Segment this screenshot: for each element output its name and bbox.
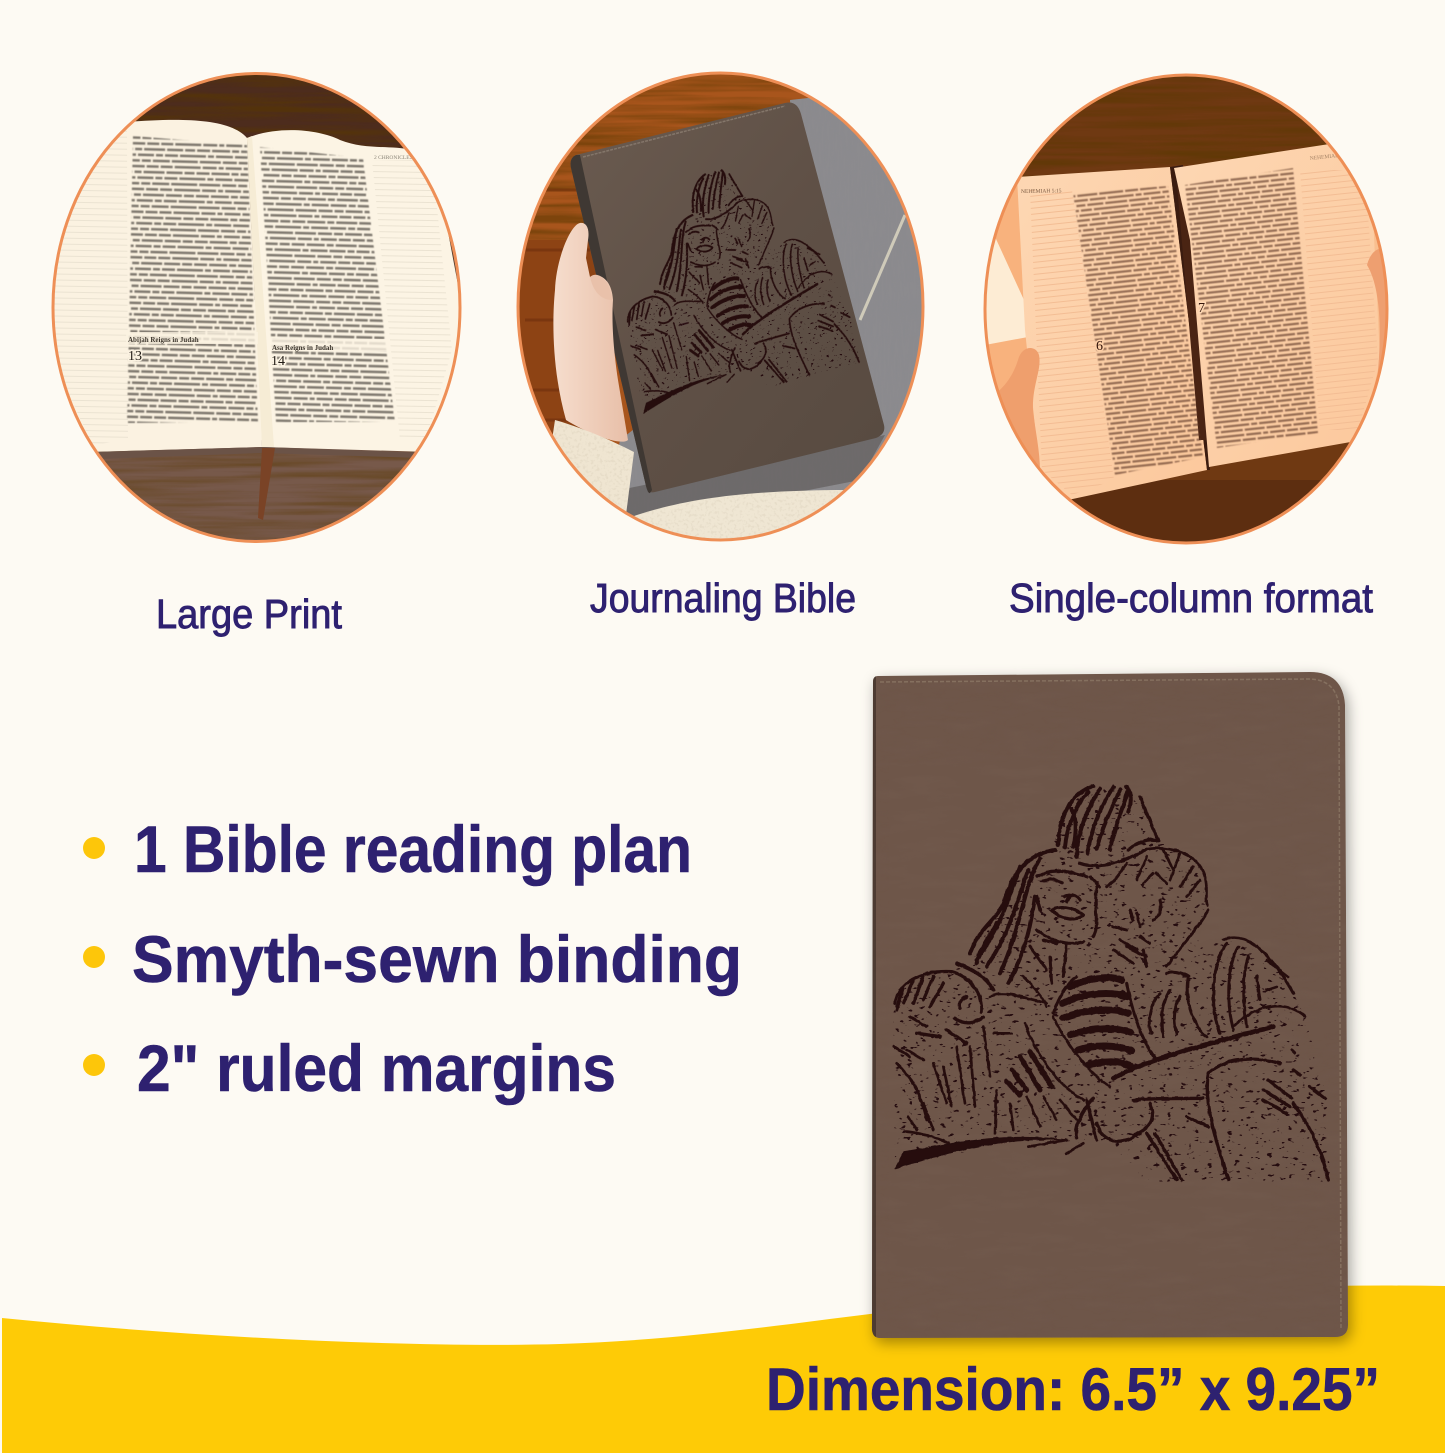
text column left [1073,186,1203,475]
left page edges and fingers [988,184,1036,428]
chapter number 13: 13 [128,349,142,364]
denim jeans [619,98,922,516]
feature: reading plan: 1 Bible reading plan [134,812,692,886]
ruled margins [1030,170,1378,495]
chapter gap left [126,332,258,344]
book page: left [40,120,262,452]
right page edge [1373,230,1380,390]
chapter number 7: 7 [1198,301,1205,316]
text column right [260,147,395,422]
ribbon marker [258,448,275,520]
bullet dot 3 [83,1054,105,1076]
right page [1174,143,1380,467]
running head: 2 CHRONICLES 14:1 [374,155,424,161]
dark gutter [1170,165,1210,470]
circle border [53,74,460,542]
dimension label: Dimension: 6.5” x 9.25” [766,1356,1380,1423]
chapter heading right: Asa Reigns in Judah [272,344,333,352]
yellow wave footer band [2,1286,1445,1453]
feature: margins: 2" ruled margins [137,1031,616,1105]
text column right [1185,168,1318,448]
Bible cover [571,102,884,492]
caption: Single-column format: Single-column format [1009,575,1374,621]
ruled margins [40,130,452,445]
bullet dot 1 [83,837,105,859]
caption: Journaling Bible: Journaling Bible [590,575,856,621]
knit sweater [634,490,844,538]
right hand [1367,248,1390,390]
engraved family portrait on cover [626,169,860,414]
chapter number 14: 14 [271,354,285,369]
bullet list of features [83,812,742,1105]
engraved family portrait [880,770,1347,1187]
chapter heading left: Abijah Reigns in Judah [128,336,199,344]
photo: single-column format open Bible [980,70,1395,550]
photo: journaling Bible held on lap [515,70,940,555]
right page edge [448,236,458,282]
caption: Large Print: Large Print [156,591,343,637]
text column left [127,136,258,423]
circle border [518,73,923,540]
lap shadow under Bible [626,435,885,516]
denim fold [860,215,905,320]
chapter gap right [270,339,390,351]
book page: right [247,130,470,452]
hand holding Bible [553,223,628,442]
left page [1017,167,1207,500]
book gutter [247,136,274,447]
large leather Bible cover [870,670,1350,1340]
bullet dot 2 [83,946,105,968]
book bottom edge [92,447,430,459]
left hand [985,348,1040,472]
knit sleeve [552,420,634,515]
running head right: NEHEMIAH 7:10 [1310,152,1351,162]
photo: large print open Bible [40,70,470,545]
chapter number 6: 6 [1096,339,1103,354]
running head left: NEHEMIAH 5:15 [1021,188,1062,195]
circle border [985,75,1387,543]
thumb nail [590,274,608,299]
feature: binding: Smyth-sewn binding [132,922,742,996]
